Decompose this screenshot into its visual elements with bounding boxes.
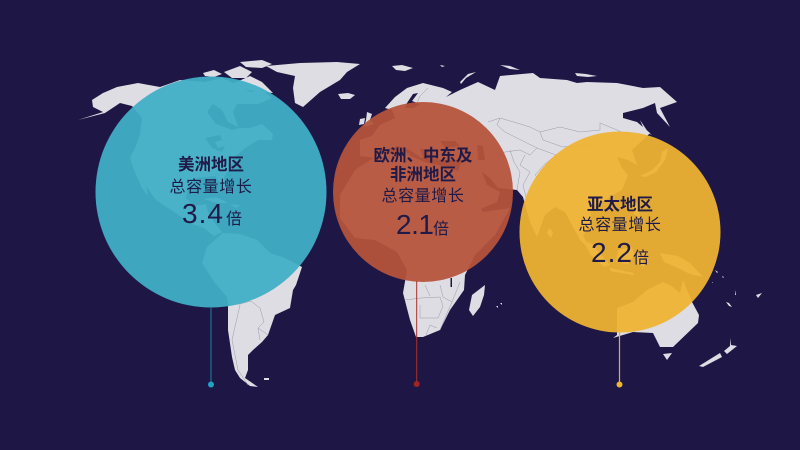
label: Americas: 美洲地区 bbox=[178, 154, 244, 174]
label: Europe, Middle East and Africa: 总容量增长 bbox=[381, 187, 465, 205]
label: Asia Pacific: 倍 bbox=[633, 249, 649, 267]
label: Europe, Middle East and Africa: 倍 bbox=[433, 220, 449, 238]
land: Australia bbox=[613, 280, 699, 347]
circle: Americas bbox=[96, 76, 326, 308]
land: Hispaniola bbox=[230, 204, 240, 208]
land: Franz Josef Land bbox=[440, 65, 445, 67]
label: Asia Pacific: 亚太地区 bbox=[587, 195, 653, 214]
land: Fiji bbox=[756, 293, 762, 298]
land: Pacific islands bbox=[496, 270, 736, 308]
land: Tasmania bbox=[663, 353, 672, 360]
land: Sakhalin bbox=[640, 120, 652, 135]
land: Severnaya Zemlya bbox=[500, 65, 520, 70]
label: Europe, Middle East and Africa: 2.1 bbox=[396, 209, 433, 240]
land: Eurasia bbox=[360, 73, 677, 250]
inland sea: Black Sea bbox=[440, 141, 460, 148]
land: Cuba bbox=[204, 197, 228, 203]
label: Americas bbox=[169, 154, 253, 229]
land: Iceland bbox=[338, 93, 355, 99]
inland sea: Lake Malawi bbox=[450, 278, 452, 287]
land: New Siberian Islands bbox=[575, 73, 597, 77]
land: Sulawesi bbox=[637, 252, 648, 268]
inland sea: Mediterranean bbox=[385, 150, 458, 170]
land: Novaya Zemlya bbox=[460, 72, 476, 84]
label: Americas: 总容量增长 bbox=[169, 178, 253, 196]
pointer: Asia Pacific bbox=[616, 332, 622, 388]
label: Europe, Middle East and Africa: 欧洲、中东及 bbox=[374, 145, 473, 165]
land: Sumatra bbox=[583, 240, 610, 267]
land: Baffin Island bbox=[232, 76, 273, 93]
land: Falkland Islands bbox=[264, 378, 269, 380]
label: Americas: 3.4 bbox=[182, 198, 224, 229]
label: Europe, Middle East and Africa: 非洲地区 bbox=[390, 165, 456, 184]
label: Europe, Middle East and Africa bbox=[374, 145, 473, 240]
land: Japan bbox=[640, 148, 668, 177]
label: Americas: 倍 bbox=[226, 210, 242, 228]
pointer: Europe, Middle East and Africa bbox=[414, 281, 420, 387]
land: Arctic island bbox=[224, 66, 252, 78]
circle: Europe, Middle East and Africa bbox=[333, 102, 513, 282]
land: Sri Lanka bbox=[547, 228, 553, 238]
label: Asia Pacific bbox=[578, 195, 662, 268]
land: Ellesmere Island bbox=[240, 60, 272, 68]
world map bbox=[78, 60, 762, 387]
land: Borneo bbox=[616, 247, 634, 264]
land: North America bbox=[78, 78, 273, 236]
land: New Zealand south bbox=[699, 353, 722, 367]
land: Canadian Arctic islands bbox=[203, 70, 222, 77]
land: Svalbard bbox=[392, 65, 413, 71]
inland sea: Caspian Sea bbox=[477, 145, 485, 160]
label: Asia Pacific: 总容量增长 bbox=[578, 216, 662, 234]
circle: Asia Pacific bbox=[520, 132, 720, 332]
land: Great Britain bbox=[364, 112, 374, 127]
land: South America bbox=[202, 233, 302, 387]
inland sea: Great Lakes bbox=[205, 135, 225, 152]
land: Ireland bbox=[359, 118, 365, 125]
land: Java bbox=[610, 268, 634, 275]
country borders bbox=[228, 88, 632, 385]
land: Philippines bbox=[632, 200, 640, 218]
land: Madagascar bbox=[469, 285, 485, 316]
label: Asia Pacific: 2.2 bbox=[591, 237, 633, 268]
land: New Zealand north bbox=[724, 338, 737, 354]
land: Greenland bbox=[266, 62, 360, 107]
inland sea: Baltic bbox=[405, 93, 420, 108]
land: New Guinea bbox=[660, 253, 703, 277]
pointer: Americas bbox=[208, 307, 214, 388]
land: New Caledonia bbox=[726, 302, 732, 307]
land: Africa bbox=[340, 152, 510, 337]
